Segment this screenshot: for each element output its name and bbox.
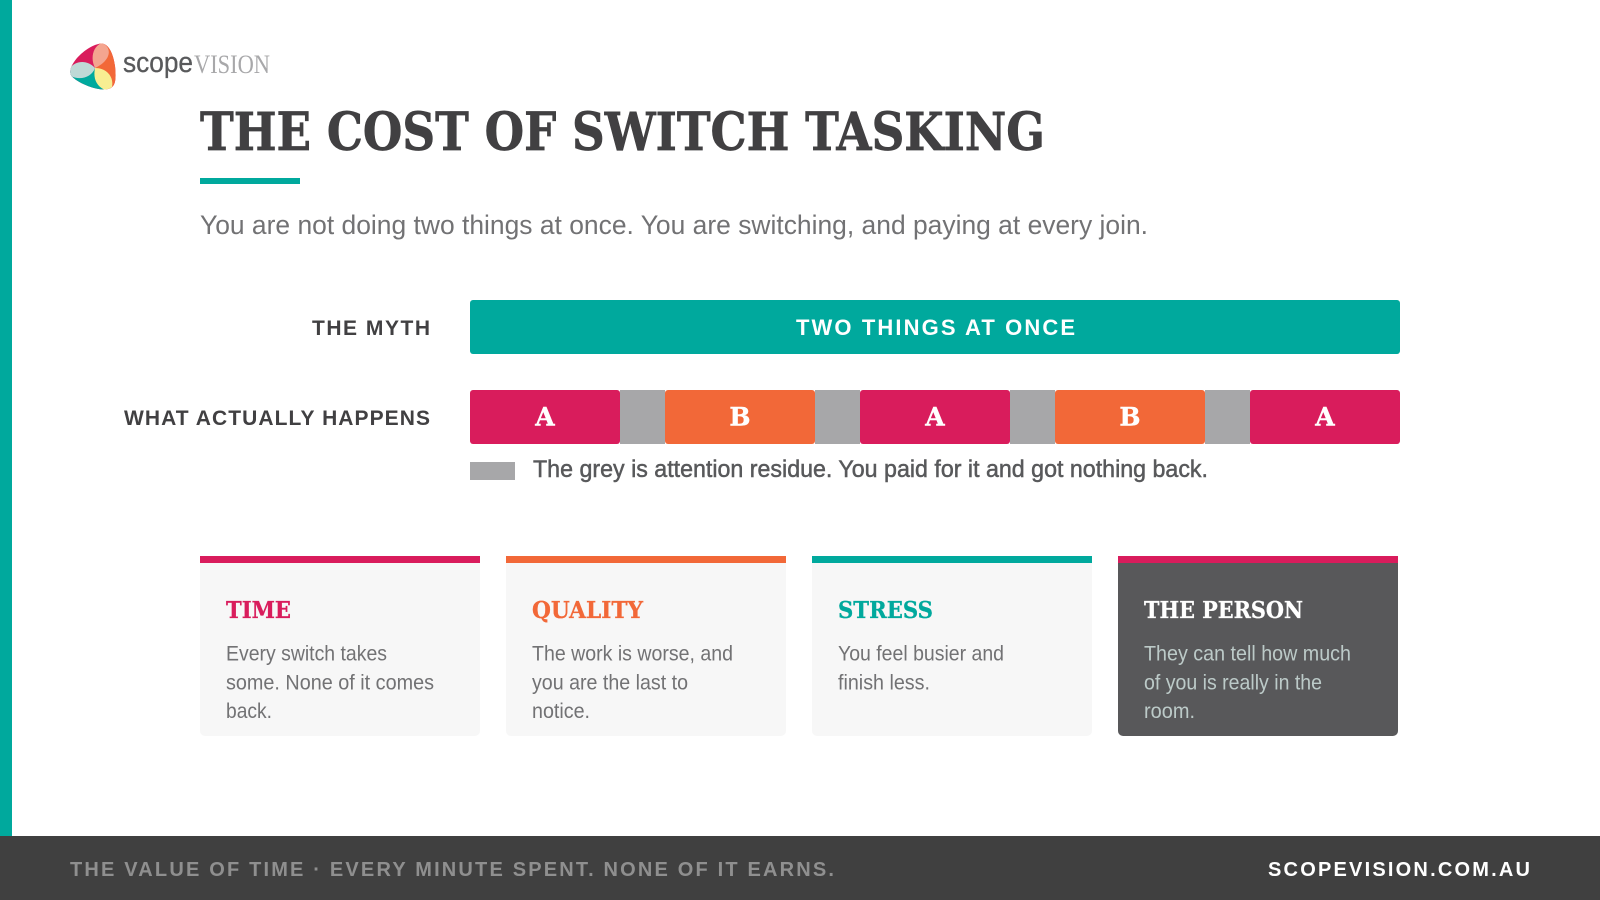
footer url: SCOPEVISION.COM.AU [1268,859,1530,881]
text: the person: of you is really in the [1144,672,1322,694]
text: the person [1144,642,1351,723]
logo: scopeVISION: VISION [194,50,270,79]
segment A [470,390,620,444]
heading: time: TIME [226,597,291,624]
segment B [665,390,815,444]
segment B [1055,390,1205,444]
legend text: The grey is attention residue. You paid for it and got nothing back. [533,456,1208,483]
text: stress [838,642,1004,694]
text: time: back. [226,700,272,723]
footer [0,836,1600,900]
panel: quality [506,556,786,736]
text: the person: They can tell how much [1144,642,1351,666]
segment B: B [1119,402,1141,432]
panel: time [200,556,480,736]
text: quality [532,642,733,723]
text: time [226,642,434,723]
segment B: B [729,402,751,432]
switching bar [470,390,1400,444]
text: quality: notice. [532,700,590,723]
segment A: A [924,402,945,432]
segment A [860,390,1010,444]
segment A: A [534,402,555,432]
text: time: Every switch takes [226,642,387,666]
panel: the person [1118,556,1398,736]
icon: logo mark [70,44,116,90]
logo: scopeVISION [70,44,270,90]
footer tagline: THE VALUE OF TIME · EVERY MINUTE SPENT. NONE OF IT EARNS. [70,859,834,881]
logo wordmark: scope [123,47,193,79]
title underline [200,178,300,184]
heading: stress: STRESS [838,597,933,624]
row label: what actually happens: WHAT ACTUALLY HAPPENS [124,407,430,430]
subtitle: You are not doing two things at once. You are switching, and paying at every join. [200,210,1148,240]
panel: stress [812,556,1092,736]
row label: the myth: THE MYTH [312,317,430,340]
text: quality: The work is worse, and [532,642,733,666]
segment A: A [1314,402,1335,432]
text: stress: finish less. [838,672,930,694]
heading: quality: QUALITY [532,597,644,624]
text: stress: You feel busier and [838,642,1004,666]
legend [470,456,1208,483]
text: the person: room. [1144,700,1195,723]
left accent bar [0,0,12,836]
title: THE COST OF SWITCH TASKING [200,102,1045,163]
text: time: some. None of it comes [226,672,434,694]
myth bar [470,300,1400,354]
text: quality: you are the last to [532,672,688,694]
heading: the person: THE PERSON [1144,597,1303,624]
segment A [1250,390,1400,444]
myth bar label: TWO THINGS AT ONCE [796,315,1075,340]
